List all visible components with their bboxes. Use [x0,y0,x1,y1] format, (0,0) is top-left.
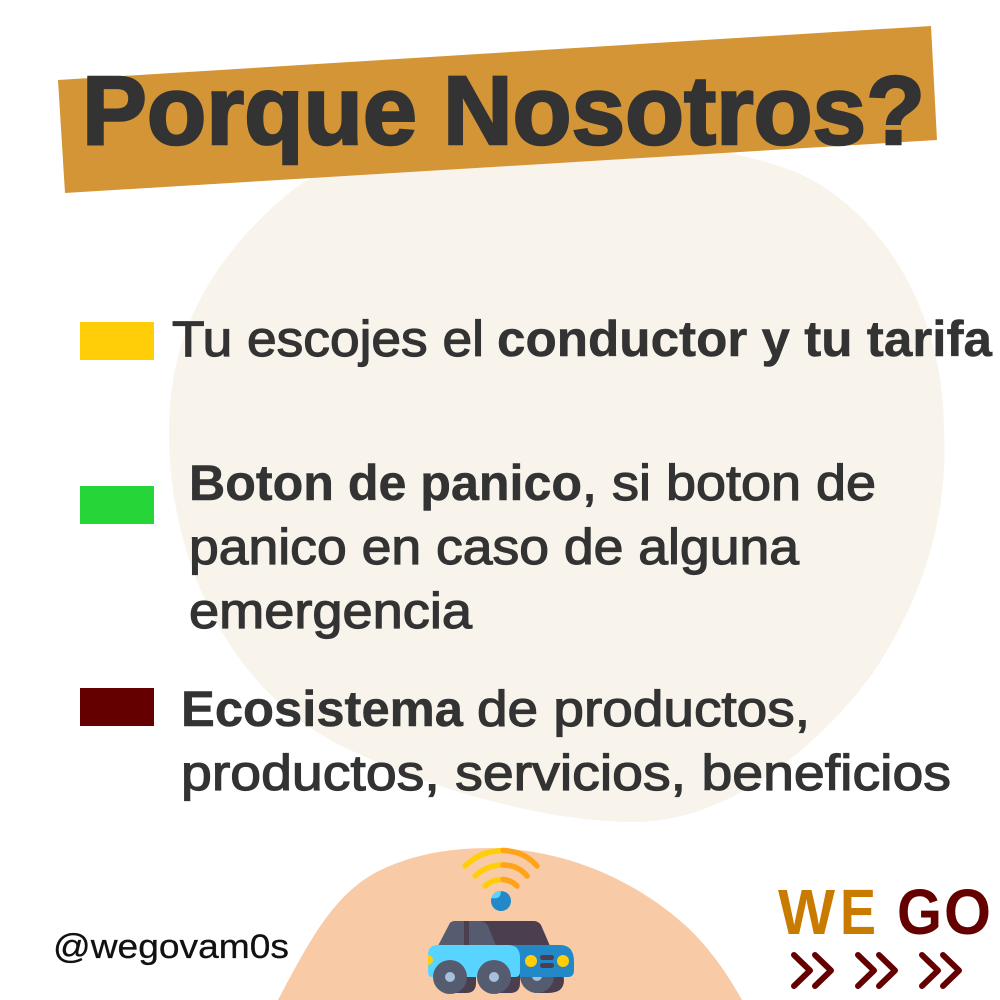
logo wordmark [778,876,991,948]
lights and grille [525,955,537,967]
logo wordmark: E [840,876,876,948]
item 1 text: conductor y tu tarifa [497,311,993,367]
item 3 text: productos, servicios, beneficios [181,745,951,801]
item 1 text [172,311,993,367]
handle: @wegovam0s [53,928,289,966]
item 1 text: Tu escojes el [172,311,484,367]
hood [505,945,574,977]
logo chevrons [794,955,959,986]
title: Nosotros? [443,56,925,165]
title: Porque [82,56,417,165]
wifi arcs [465,850,537,886]
wheel shadows behind body [450,970,476,993]
logo wordmark: G [897,876,942,948]
bullet: yellow [80,322,154,360]
body [428,945,520,977]
item 2 text [189,455,876,639]
bullet: green [80,486,154,524]
item 2 text: emergencia [189,583,472,639]
item 2 text: panico en caso de alguna [189,519,799,575]
logo: WE GO [778,876,991,986]
wheels [433,960,467,994]
rear wheel [525,965,564,993]
item 3 text [181,681,951,801]
item 2 text: Boton de panico [189,455,582,511]
bullet: maroon [80,688,154,726]
title [82,56,925,165]
item 3 text: Ecosistema [181,681,464,737]
item 2 text: , si boton de [582,455,876,511]
cabin [438,921,550,946]
icon: connected car [428,850,574,994]
background blob [169,138,945,822]
signal dot [491,891,511,911]
item 3 text: de productos, [477,681,810,737]
logo wordmark: W [778,876,836,948]
peach hill [278,848,742,1000]
logo wordmark: O [944,876,991,948]
title banner [58,26,937,193]
